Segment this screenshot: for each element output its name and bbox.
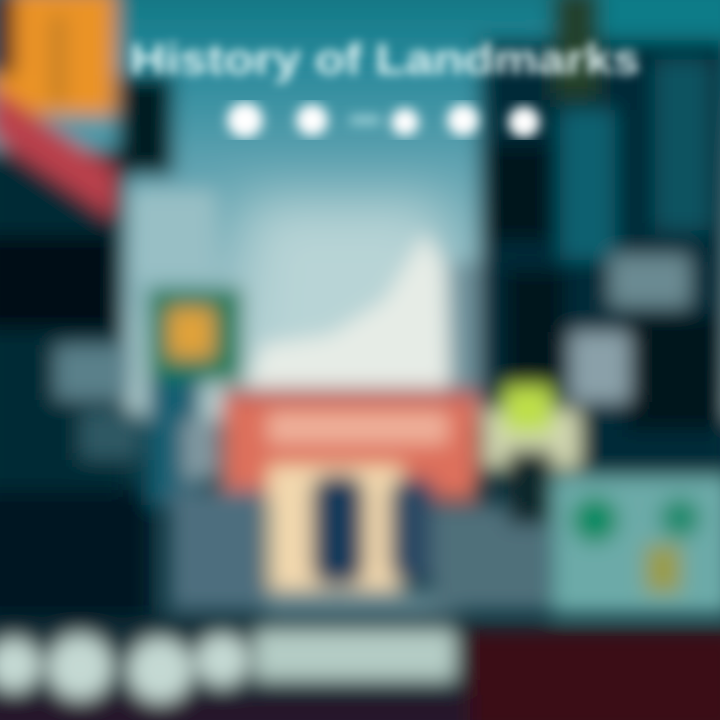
panel: right dark buildings bbox=[480, 0, 720, 480]
panel: lime figure bbox=[484, 386, 580, 524]
panel: left buildings bbox=[0, 75, 215, 630]
mountain and tower bbox=[245, 232, 486, 397]
background sky bbox=[0, 0, 720, 420]
panel: green sign bbox=[148, 288, 242, 505]
panel: lower right teal panel bbox=[552, 476, 720, 614]
title: History of Landmarks bbox=[130, 35, 640, 84]
panel: bottom strip bbox=[0, 618, 720, 720]
panel: top-left orange building bbox=[0, 0, 115, 220]
panel: street and figures bbox=[170, 420, 550, 615]
title icons bbox=[227, 102, 540, 138]
panel: red gate bbox=[222, 388, 478, 590]
stat circles bbox=[0, 634, 248, 702]
footer bar bbox=[255, 630, 455, 680]
